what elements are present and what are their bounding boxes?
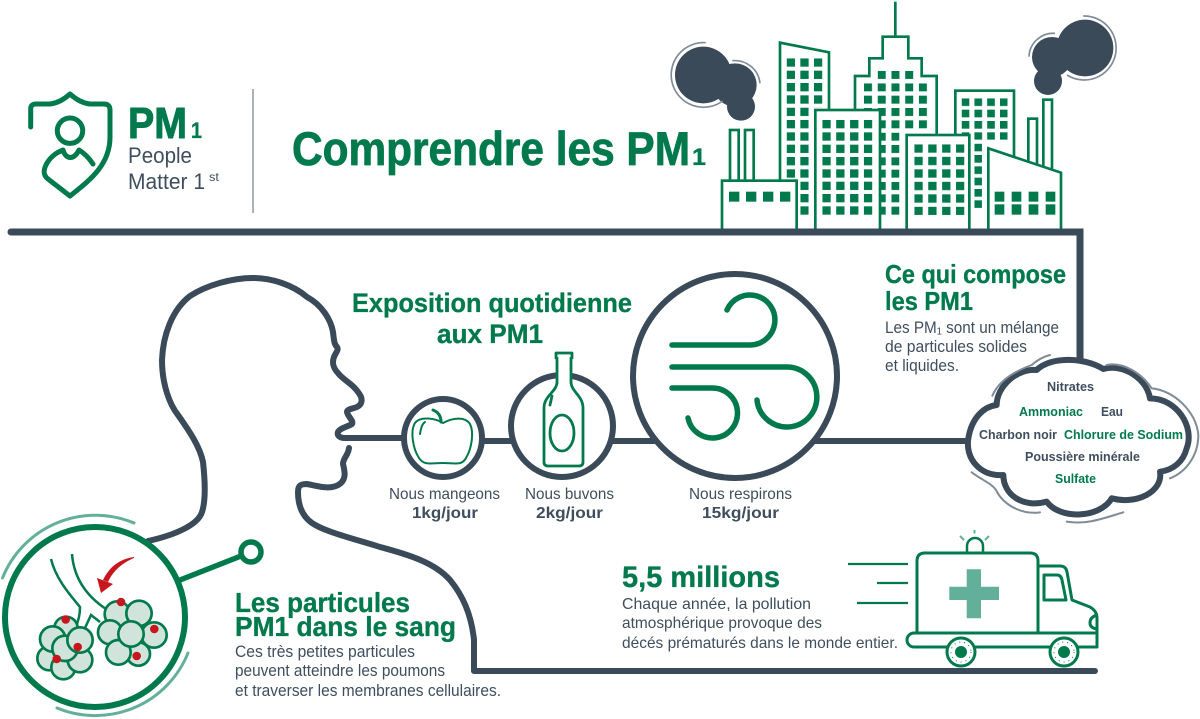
- right chimneys and factory: [988, 100, 1061, 230]
- text block: 5,5 millions: atmosphérique provoque des: [622, 615, 822, 632]
- text block: Ce qui compose les PM1: et liquides.: [885, 356, 959, 375]
- label: Nous buvons: [525, 486, 614, 522]
- magnifier ring: [5, 527, 185, 707]
- text block: Les particules PM1 dans le sang: Les particules: [235, 587, 410, 618]
- text block: Ce qui compose les PM1: Ce qui compose: [885, 259, 1066, 289]
- text block: Ce qui compose les PM1: [885, 259, 1066, 375]
- connecting line: mouth through the exposure circles to the cloud: [345, 438, 975, 441]
- text block: Ce qui compose les PM1: les PM1: [885, 286, 973, 316]
- medical cross: [949, 569, 999, 618]
- left slanted tower: [780, 43, 829, 230]
- label: Nous respirons: 15kg/jour: [702, 505, 779, 522]
- cloud: composition of PM1: [968, 355, 1198, 523]
- label: Nous mangeons: 1kg/jour: [412, 505, 478, 522]
- text block: Ce qui compose les PM1: de particules solides: [885, 337, 1027, 356]
- label: Nous respirons: Nous respirons: [689, 486, 792, 503]
- text block: Les particules PM1 dans le sang: PM1 dans le sang: [235, 611, 456, 642]
- icon: wind in circle: [633, 274, 837, 478]
- left chimneys and factory: [722, 130, 797, 230]
- label: Nous buvons: Nous buvons: [525, 486, 614, 503]
- connector with node: [180, 542, 261, 580]
- text block: Les particules PM1 dans le sang: Ces très petites particules: [235, 643, 415, 661]
- label: Nous buvons: 2kg/jour: [536, 505, 603, 522]
- bronchi: [51, 554, 106, 630]
- text block: 5,5 millions: décés prématurés dans le monde entier.: [622, 635, 898, 652]
- logo wordmark: 1: [191, 118, 202, 143]
- ring accents: [2, 515, 188, 716]
- heading: Exposition quotidienne: [352, 288, 632, 349]
- frame line: top and right: [11, 232, 1080, 365]
- label: Nous mangeons: [389, 486, 500, 522]
- front building right: [907, 135, 969, 230]
- icon: shield with person: [31, 94, 110, 196]
- logo wordmark: Matter 1: [128, 169, 205, 194]
- front building left: [815, 110, 880, 230]
- icon: left smoke cloud: [671, 43, 760, 121]
- icon: bottle in circle: [511, 353, 613, 477]
- skyscraper spire and central tower: [855, 2, 937, 230]
- text block: 5,5 millions: Chaque année, la pollution: [622, 596, 811, 613]
- label: Nous mangeons: Nous mangeons: [389, 486, 500, 503]
- title: 1: [692, 144, 706, 171]
- icon: ambulance: [848, 530, 1097, 666]
- logo wordmark: [128, 99, 220, 194]
- text block: Les particules PM1 dans le sang: [235, 587, 501, 700]
- heading: Exposition quotidienne: Exposition quotidienne: [352, 288, 632, 318]
- cloud labels: Charbon noir: [979, 428, 1057, 442]
- text block: 5,5 millions: 5,5 millions: [622, 561, 780, 594]
- illustration: city skyline with smoke: [671, 2, 1116, 230]
- red arrow: [97, 557, 134, 593]
- logo wordmark: PM: [128, 99, 187, 148]
- text block: 5,5 millions: [622, 561, 898, 652]
- head and body outline: [148, 278, 1095, 671]
- text block: Les particules PM1 dans le sang: peuvent atteindre les poumons: [235, 662, 445, 680]
- logo wordmark: People: [128, 143, 192, 168]
- icon: right smoke cloud: [1029, 16, 1116, 95]
- alveoli clusters: [37, 601, 167, 679]
- speed lines: [848, 564, 908, 603]
- wheels: [947, 638, 1078, 666]
- label: Nous respirons: [689, 486, 792, 522]
- logo wordmark: st: [209, 170, 220, 184]
- cloud labels: Sulfate: [1055, 472, 1096, 486]
- text block: Les particules PM1 dans le sang: et traverser les membranes cellulaires.: [235, 682, 501, 700]
- red particles: [52, 598, 159, 663]
- cloud labels: Nitrates: [1047, 380, 1094, 394]
- text block: Ce qui compose les PM1: Les PM₁ sont un mélange: [885, 318, 1059, 337]
- cloud labels: Poussière minérale: [1025, 450, 1140, 464]
- cloud labels: Eau: [1101, 405, 1123, 419]
- cloud outline: [968, 355, 1198, 523]
- vehicle body: [907, 553, 1097, 647]
- cloud labels: Chlorure de Sodium: [1064, 428, 1183, 442]
- lung magnifier: [2, 515, 261, 716]
- cloud labels: Ammoniac: [1019, 405, 1083, 419]
- right tower: [955, 91, 1014, 230]
- beacon: [960, 530, 989, 553]
- heading: Exposition quotidienne: aux PM1: [437, 319, 543, 349]
- logo: PM1 People Matter 1st: [31, 94, 220, 196]
- icon: apple in circle: [404, 399, 482, 477]
- title: Comprendre les PM: [292, 122, 690, 175]
- cloud labels: [979, 380, 1183, 486]
